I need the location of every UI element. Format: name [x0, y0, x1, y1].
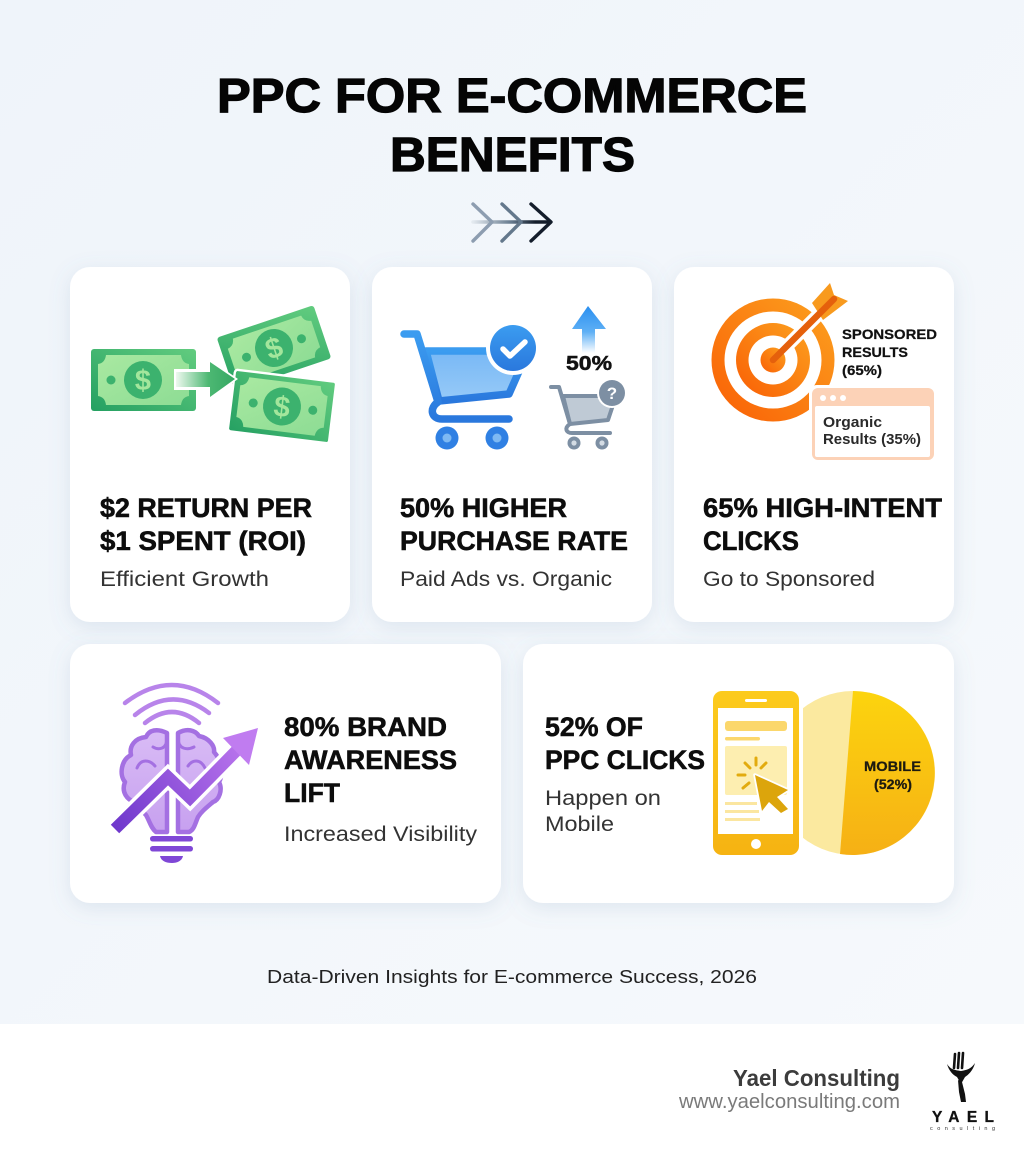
heading: [703, 493, 942, 556]
bill: left: $: [135, 365, 151, 397]
subtext: Happen on: [545, 787, 661, 810]
callout: organic results window: Organic: [823, 415, 882, 431]
bill: top right: $: [262, 331, 287, 367]
subtext: Efficient Growth: [100, 568, 269, 591]
panel: purchase rate: [372, 267, 652, 622]
heading: [100, 493, 312, 556]
signal waves: [125, 685, 218, 723]
heading: AWARENESS: [284, 745, 457, 775]
icon: grey cart: [551, 378, 627, 450]
panel: ROI: [70, 267, 350, 622]
heading: [400, 493, 628, 556]
label: 50%: 50%: [566, 353, 612, 375]
bulb base: [150, 836, 193, 863]
heading: CLICKS: [703, 526, 799, 556]
chart: mobile pie: [771, 691, 935, 855]
label: sponsored results: RESULTS: [842, 344, 908, 360]
footer: [0, 1024, 1024, 1154]
bill: bottom right: [228, 370, 336, 443]
label: sponsored results: (65%): [842, 362, 882, 378]
chart: mobile pie: (52%): [874, 777, 912, 792]
heading: LIFT: [284, 778, 340, 808]
icon: target with arrow: [712, 283, 848, 422]
website: www.yaelconsulting.com: [678, 1091, 900, 1113]
icon: money bills: [91, 305, 336, 443]
heading: 50% HIGHER: [400, 493, 567, 523]
heading: 65% HIGH-INTENT: [703, 493, 942, 523]
arrow: up: [572, 306, 606, 353]
subtext: Mobile: [545, 813, 614, 836]
logo: [930, 1053, 995, 1132]
logo: YAEL: [932, 1109, 994, 1126]
title: PPC FOR E-COMMERCE: [217, 70, 807, 123]
subtext: [545, 787, 661, 836]
heading: PURCHASE RATE: [400, 526, 628, 556]
subtext: Increased Visibility: [284, 823, 478, 846]
heading: $2 RETURN PER: [100, 493, 312, 523]
title: [217, 70, 807, 182]
heading: [545, 712, 705, 775]
chart: mobile pie: MOBILE: [864, 759, 921, 774]
icon: phone with cursor: [709, 687, 803, 859]
label: sponsored results: [842, 326, 937, 378]
icon: blue cart: [404, 321, 540, 450]
bill: left: [91, 349, 196, 411]
icon: brain bulb with growth arrow: [115, 685, 258, 863]
panel: brand awareness: [70, 644, 501, 903]
callout: organic results window: [809, 385, 937, 463]
heading: 80% BRAND: [284, 712, 447, 742]
subtext: Paid Ads vs. Organic: [400, 568, 612, 591]
brain: [122, 730, 222, 832]
logo: consulting: [930, 1126, 995, 1132]
growth arrow: [115, 747, 240, 829]
panel: mobile clicks: [523, 644, 954, 903]
icon: triple chevron arrow: [473, 204, 551, 241]
arrow: bills multiply: [174, 358, 238, 400]
panel: high-intent clicks: [674, 267, 954, 622]
subtext: Go to Sponsored: [703, 568, 875, 591]
heading: $1 SPENT (ROI): [100, 526, 306, 556]
bill: top right: [217, 305, 331, 391]
bill: bottom right: $: [272, 391, 292, 424]
brand name: Yael Consulting: [733, 1065, 900, 1091]
heading: 52% OF: [545, 712, 643, 742]
label: sponsored results: SPONSORED: [842, 326, 937, 342]
heading: [284, 712, 457, 808]
caption: Data-Driven Insights for E-commerce Success, 2026: [267, 967, 757, 987]
title: BENEFITS: [390, 129, 635, 182]
callout: organic results window: Results (35%): [823, 432, 921, 448]
icon: grey cart: ?: [607, 384, 617, 403]
heading: PPC CLICKS: [545, 745, 705, 775]
